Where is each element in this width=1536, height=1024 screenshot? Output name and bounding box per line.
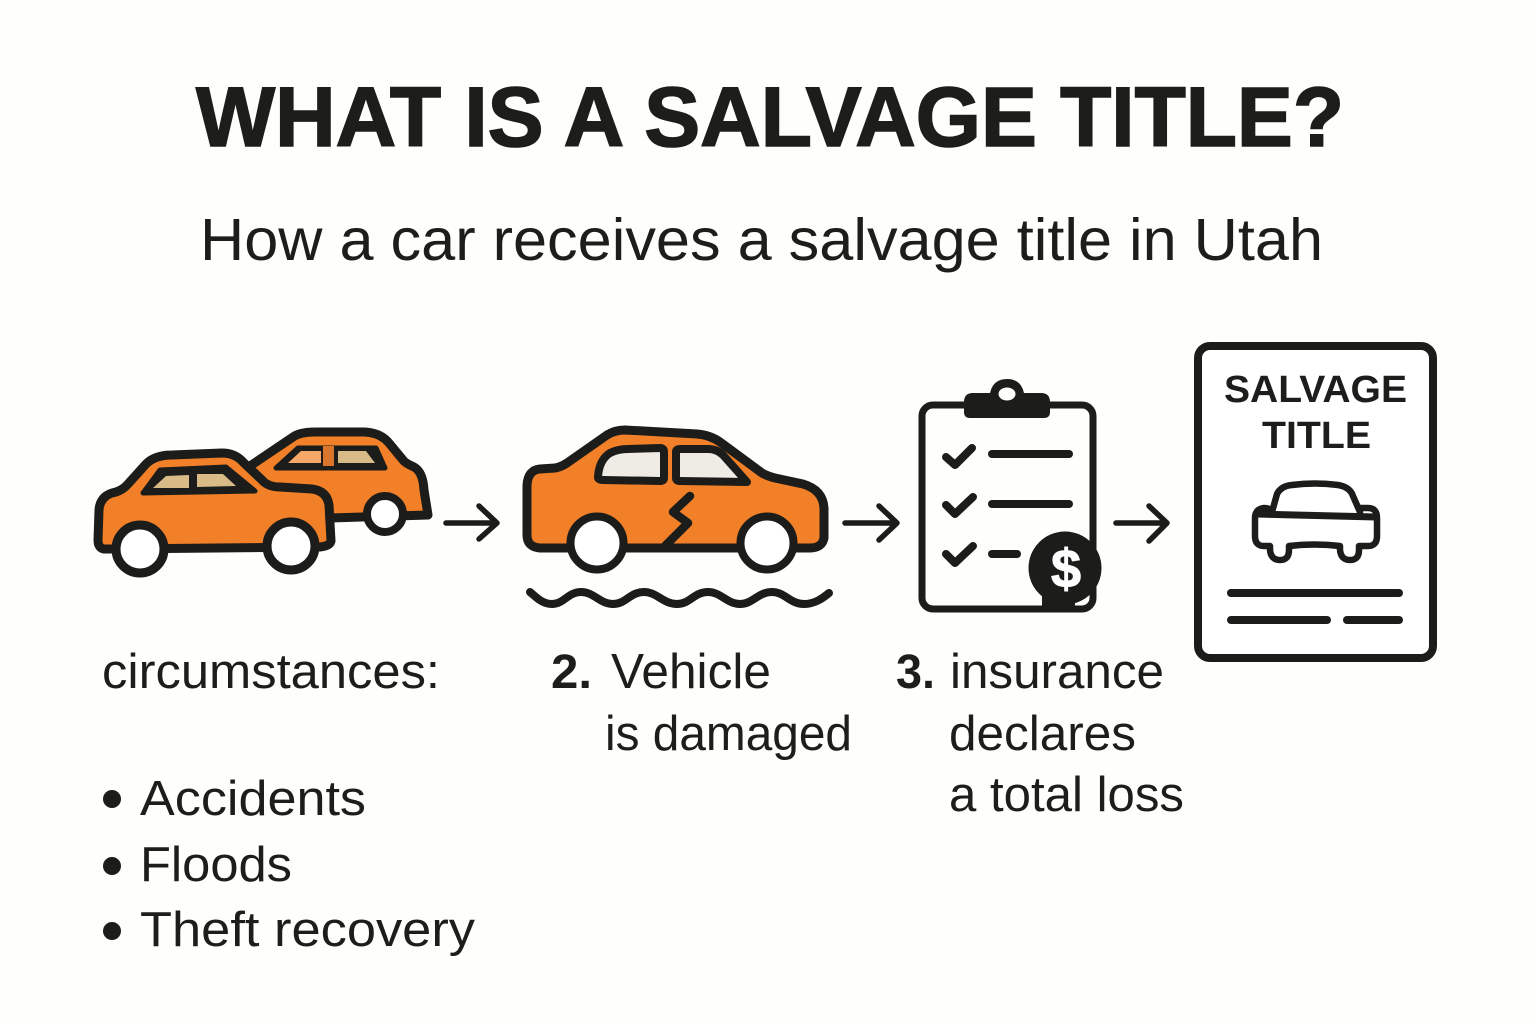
icon: damaged car over water [527,430,829,604]
dollar badge: $ [1051,539,1081,599]
windows [598,448,747,482]
clipboard board [922,405,1093,609]
step 3 label: declares [949,707,1136,761]
step 2 label: Vehicle [611,645,771,699]
title: WHAT IS A SALVAGE TITLE? [196,70,1344,164]
step 1 bullet list [103,772,476,957]
panel: salvage title document [1198,346,1433,658]
document heading [1224,369,1407,457]
crack [665,496,690,546]
arrow 2 [845,506,897,540]
icon: clipboard with checklist and dollar badge [922,379,1102,612]
dollar badge [1028,532,1102,612]
document text lines [1231,593,1399,620]
step 1 label: circumstances: [102,645,440,699]
step 2 label: is damaged [605,707,852,761]
wheels [570,516,794,570]
icon: two cars in a collision [98,432,428,573]
document heading: SALVAGE [1224,369,1407,411]
rear car [250,432,428,532]
step 1 bullet list: Floods [140,838,292,892]
water wave [530,592,829,604]
step 3 label [896,645,1184,822]
step 2 label [551,645,852,761]
arrow 3 [1116,506,1167,541]
arrow 1 [446,506,497,539]
step 3 label: insurance [950,645,1164,699]
subtitle: How a car receives a salvage title in Utah [200,207,1323,273]
clip [964,379,1050,418]
document heading: TITLE [1262,415,1371,457]
step 1 bullet list: Theft recovery [140,903,476,957]
checklist [946,448,1069,563]
step 2 label: 2. [551,646,592,699]
car body [527,430,824,548]
step 1 bullet list: Accidents [140,772,366,826]
step 3 label: a total loss [949,768,1184,822]
step 3 label: 3. [896,646,935,699]
icon: car outline [1255,484,1377,560]
front car [98,453,331,573]
document border [1198,346,1433,658]
